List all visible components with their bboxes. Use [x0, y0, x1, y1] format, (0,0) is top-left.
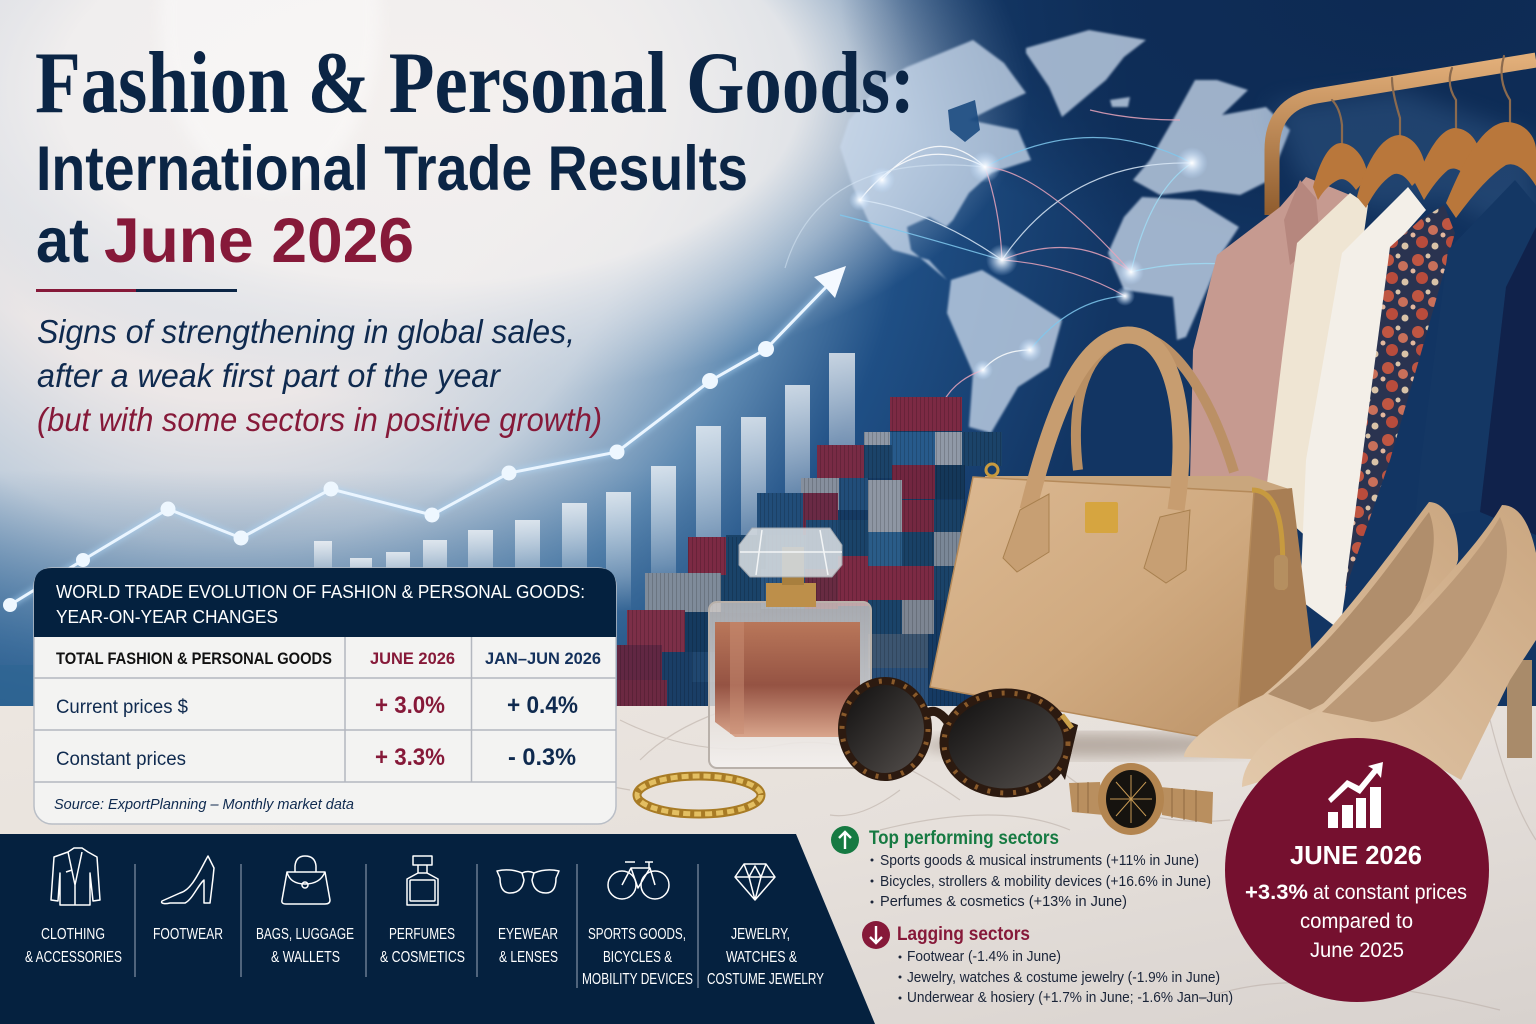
text: clothing — [25, 926, 122, 966]
text: eyewear — [498, 926, 558, 966]
callout text: +3.3% — [1245, 881, 1308, 904]
clothing rack — [1190, 56, 1536, 630]
icon: clothing — [51, 848, 100, 905]
table header: YEAR-ON-YEAR CHANGES — [56, 606, 278, 627]
icon: eyewear — [497, 870, 559, 893]
icon: diamond — [735, 864, 775, 900]
panel: world trade table — [34, 568, 616, 824]
list: lagging: Underwear & hosiery (+1.7% in June; -1.6% Jan–Jun) — [907, 990, 1233, 1006]
panel: product categories band — [0, 834, 875, 1024]
icon: perfume — [407, 856, 438, 905]
column headings — [56, 650, 601, 668]
panel: top performing sectors — [831, 826, 1211, 910]
front handle — [1028, 335, 1181, 510]
title rule — [36, 289, 237, 292]
text: bags: BAGS, LUGGAGE — [256, 926, 354, 943]
text: jewelry — [707, 926, 824, 988]
text: perfumes: & COSMETICS — [380, 949, 465, 966]
list: top performing: Sports goods & musical instruments (+11% in June) — [880, 853, 1199, 869]
text: sports — [582, 926, 693, 988]
back handle — [1076, 338, 1125, 470]
table header: WORLD TRADE EVOLUTION OF FASHION & PERSONAL GOODS: — [56, 581, 585, 602]
watch — [1069, 763, 1213, 835]
subtitle — [37, 313, 602, 438]
row: constant prices — [56, 744, 576, 771]
perfume bottle — [709, 528, 871, 768]
heading: lagging: Lagging sectors — [897, 924, 1030, 945]
icon: rising chart — [1328, 762, 1383, 828]
row: constant prices: - 0.3% — [508, 744, 576, 771]
callout text: June 2025 — [1310, 939, 1404, 962]
list: top performing — [870, 853, 1211, 910]
world map with trade routes — [785, 30, 1536, 433]
bar chart motif — [314, 353, 855, 616]
text: clothing: CLOTHING — [41, 926, 105, 943]
callout text — [1245, 840, 1467, 962]
subtitle: (but with some sectors in positive growth) — [37, 401, 602, 438]
list: lagging: Footwear (-1.4% in June) — [907, 949, 1061, 965]
text: sports: SPORTS GOODS, — [588, 926, 686, 943]
row: constant prices: Constant prices — [56, 749, 186, 770]
list: top performing: Perfumes & cosmetics (+13% in June) — [880, 894, 1127, 910]
callout text: JUNE 2026 — [1290, 840, 1422, 870]
rising trend line with arrow — [3, 266, 846, 612]
column headings: TOTAL FASHION & PERSONAL GOODS — [56, 650, 332, 668]
list: lagging: Jewelry, watches & costume jewelry (-1.9% in June) — [907, 970, 1220, 986]
high heels — [1184, 502, 1536, 787]
text: jewelry: WATCHES & — [726, 949, 798, 966]
containers stack — [617, 397, 1002, 708]
title: June 2026 — [104, 206, 414, 276]
text: perfumes — [380, 926, 465, 966]
garments — [1190, 177, 1536, 630]
handbag — [920, 334, 1312, 757]
callout: June 2026 circle — [1225, 738, 1489, 1002]
text: jewelry: JEWELRY, — [731, 926, 790, 943]
background: gradient sky — [0, 0, 1536, 720]
text: sports: MOBILITY DEVICES — [582, 971, 693, 988]
text: bags: & WALLETS — [271, 949, 340, 966]
list: top performing: Bicycles, strollers & mobility devices (+16.6% in June) — [880, 874, 1211, 890]
column headings: JAN–JUN 2026 — [485, 650, 601, 668]
sunglasses — [842, 681, 1078, 793]
text: clothing: & ACCESSORIES — [25, 949, 122, 966]
row: current prices: + 3.0% — [375, 692, 445, 719]
icon: down arrow — [862, 921, 890, 949]
gold plate — [1085, 502, 1118, 533]
icon: bag — [282, 856, 330, 904]
text: bags — [256, 926, 354, 966]
icon: bicycle — [608, 862, 669, 899]
text: eyewear: EYEWEAR — [498, 926, 558, 943]
list: lagging — [898, 949, 1233, 1006]
row: current prices — [56, 692, 578, 719]
row: current prices: + 0.4% — [507, 692, 578, 719]
callout text: compared to — [1300, 910, 1413, 933]
text: footwear: FOOTWEAR — [153, 926, 223, 943]
title: at — [36, 206, 89, 276]
icon: footwear — [162, 856, 214, 904]
title — [35, 35, 915, 276]
bracelet — [637, 776, 761, 814]
subtitle: after a weak first part of the year — [37, 357, 502, 394]
row: constant prices: + 3.3% — [375, 744, 445, 771]
hangers — [1313, 56, 1536, 218]
subtitle: Signs of strengthening in global sales, — [37, 313, 575, 350]
table header — [34, 568, 616, 637]
text: perfumes: PERFUMES — [389, 926, 455, 943]
left dark bars behind table — [0, 665, 34, 710]
heading: top performing: Top performing sectors — [869, 828, 1059, 849]
rack pipe — [1272, 60, 1536, 215]
panel: lagging sectors — [862, 921, 1233, 1006]
row: current prices: Current prices $ — [56, 697, 188, 718]
column headings: JUNE 2026 — [370, 650, 455, 668]
marble floor — [0, 706, 1536, 1024]
source note: Source: ExportPlanning – Monthly market data — [54, 796, 354, 813]
text: jewelry: COSTUME JEWELRY — [707, 971, 824, 988]
text: sports: BICYCLES & — [603, 949, 672, 966]
icon: up arrow — [831, 826, 859, 854]
callout text: at constant prices — [1313, 881, 1467, 904]
text: eyewear: & LENSES — [499, 949, 558, 966]
title: International Trade Results — [36, 134, 748, 204]
title: Fashion & Personal Goods: — [35, 35, 915, 132]
